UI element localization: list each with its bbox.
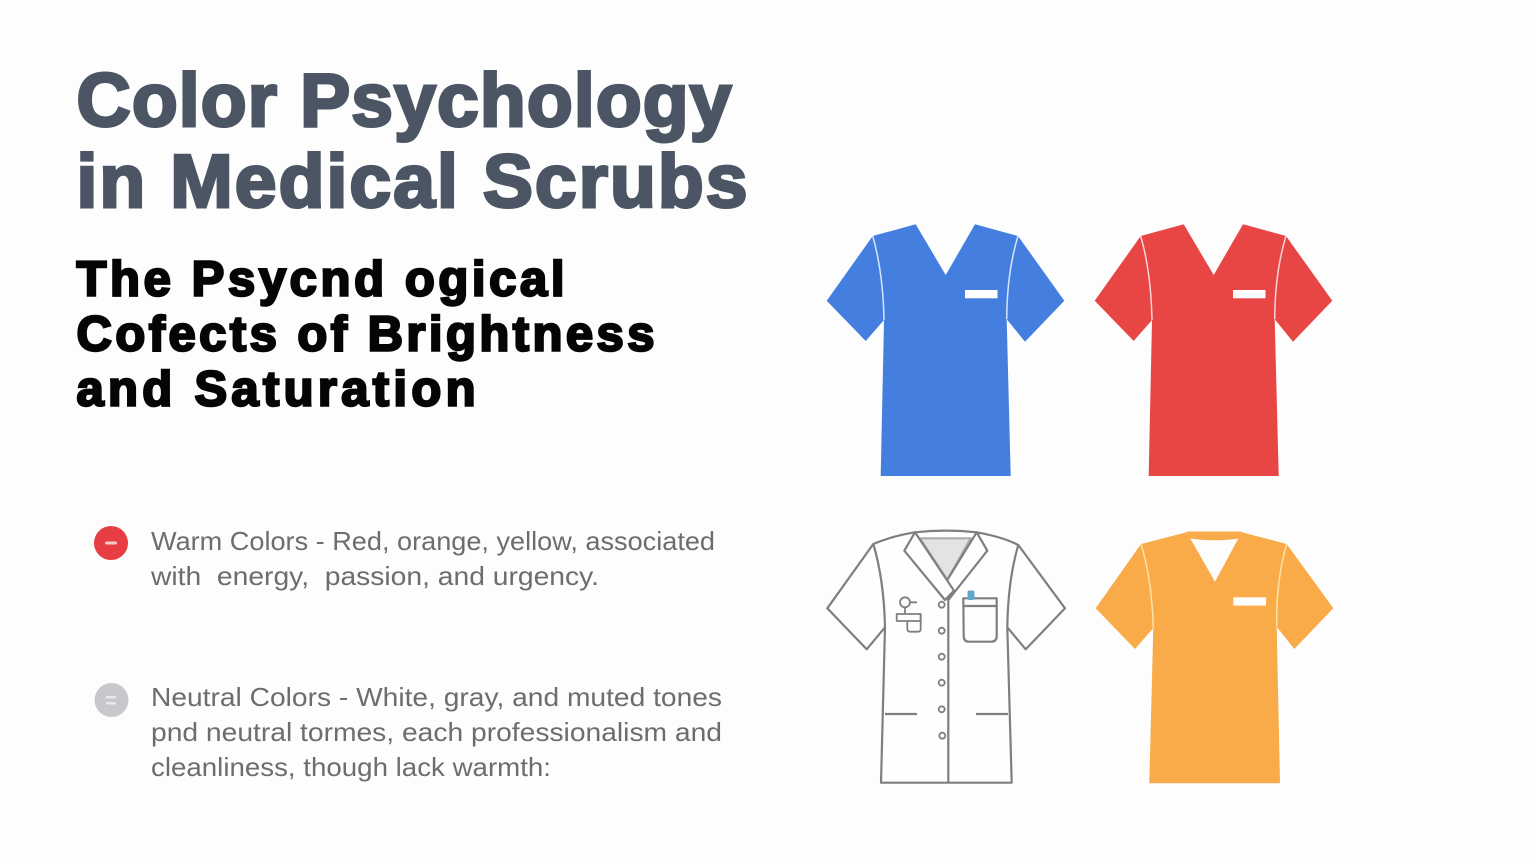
- title: in Medical Scrubs: [76, 139, 748, 223]
- left lapel: [904, 532, 954, 600]
- text: neutral colors: [151, 682, 722, 782]
- logo emblem: [897, 597, 921, 632]
- red scrub top: [1095, 224, 1332, 476]
- front placket line: [947, 600, 949, 783]
- badge: [1233, 597, 1266, 606]
- right lapel: [946, 532, 987, 600]
- text: warm colors: Warm Colors - Red, orange, yellow, associated: [151, 526, 715, 556]
- title: [76, 58, 748, 223]
- icon: warm colors bullet: [94, 526, 128, 560]
- text: neutral colors: cleanliness, though lack warmth:: [151, 752, 551, 782]
- subtitle: The Psycnd ogical: [76, 252, 564, 306]
- subtitle: [76, 252, 654, 416]
- pocket slits: [885, 713, 1008, 715]
- inner collar: [920, 538, 971, 580]
- icon: neutral colors bullet: [94, 683, 128, 717]
- text: neutral colors: Neutral Colors - White, gray, and muted tones: [151, 682, 722, 712]
- text: warm colors: with energy, passion, and urgency.: [150, 561, 599, 591]
- text: warm colors: [150, 526, 715, 591]
- title: Color Psychology: [76, 58, 732, 142]
- subtitle: Cofects of Brightness: [76, 308, 654, 362]
- pen: [968, 591, 974, 600]
- blue scrub top: [827, 224, 1064, 476]
- badge: [965, 290, 998, 298]
- chest pocket: [963, 598, 997, 642]
- buttons: [939, 602, 945, 739]
- subtitle: and Saturation: [76, 362, 476, 416]
- white lab coat: [827, 531, 1065, 783]
- text: neutral colors: pnd neutral tormes, each professionalism and: [151, 717, 722, 747]
- orange scrub top: [1096, 532, 1333, 783]
- badge: [1233, 290, 1266, 298]
- collar band: [1187, 532, 1242, 540]
